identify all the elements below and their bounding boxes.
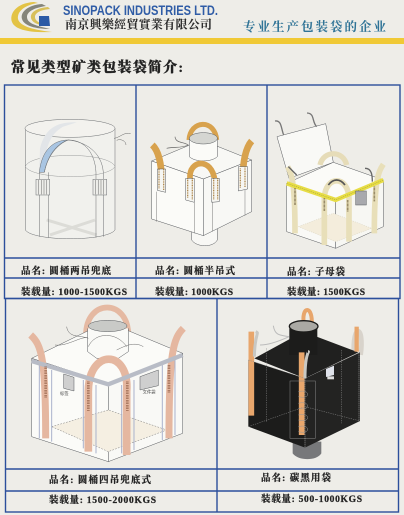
header — [0, 2, 404, 44]
panel: bag 4 illustration — [31, 307, 183, 462]
company name chinese: 南京興樂經貿實業有限公司 — [65, 16, 212, 32]
panel 1 product name: 品名: 圆桶两吊兜底 — [21, 265, 111, 277]
panel: bag 4 illustration: 标签 — [60, 390, 69, 397]
panel: bag 4 illustration: 文件袋 — [143, 388, 156, 395]
panel 5 product name: 品名: 碳黑用袋 — [261, 472, 331, 484]
panel 4 load: 装载量: 1500-2000KGS — [49, 494, 156, 506]
panel 2 load: 装载量: 1000KGS — [155, 286, 233, 298]
panel: bag 2 illustration — [152, 124, 252, 246]
panel 1 load: 装载量: 1000-1500KGS — [21, 286, 127, 298]
panel: bag 3 illustration — [275, 113, 383, 248]
heading: 常见类型矿类包装袋简介: — [11, 59, 183, 76]
company name english: SINOPACK INDUSTRIES LTD. — [63, 3, 218, 18]
yellow band — [0, 38, 404, 44]
panel 5 load: 装载量: 500-1000KGS — [261, 493, 362, 505]
slogan: 专业生产包装袋的企业 — [243, 19, 386, 34]
icon: company logo — [11, 2, 52, 32]
panel 3 product name: 品名: 子母袋 — [287, 266, 345, 278]
panel 2 product name: 品名: 圆桶半吊式 — [155, 265, 235, 277]
panel 3 load: 装载量: 1500KGS — [287, 286, 365, 298]
panel: bag 5 illustration — [248, 310, 362, 459]
panel 4 product name: 品名: 圆桶四吊兜底式 — [49, 474, 151, 486]
panel: bag 1 illustration — [25, 119, 131, 239]
